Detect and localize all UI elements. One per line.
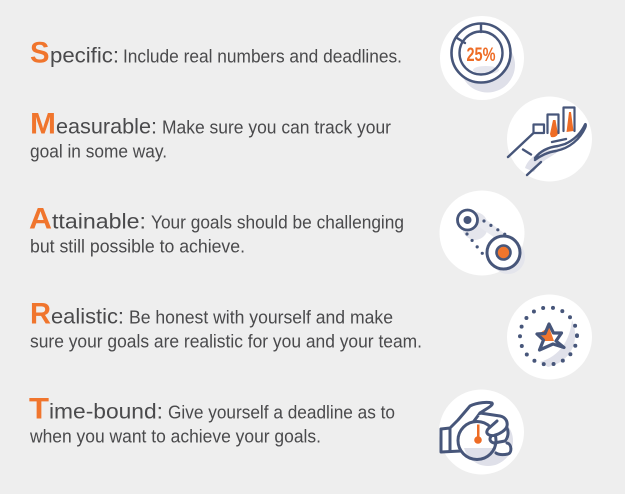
icon: 25% dial (440, 16, 524, 100)
text block: Realistic: ealistic: (51, 304, 124, 328)
text block: Realistic: Be honest with yourself and make (129, 308, 393, 328)
text block: Specific: S (30, 36, 50, 70)
text block: Attainable: ttainable: (52, 210, 146, 234)
text block: Realistic: R (30, 298, 51, 330)
icon: 25% dial: 25% (466, 45, 496, 66)
text block: Realistic (30, 298, 422, 352)
icon: hand holding bars (507, 96, 592, 182)
text block: Specific (30, 36, 402, 70)
icon: linked gears (440, 190, 525, 276)
text block: Time-bound: ime-bound: (49, 400, 163, 424)
icon: star in dotted ring (507, 294, 592, 380)
text block: Attainable: A (29, 202, 52, 236)
text block: Measurable: easurable: (56, 114, 157, 138)
text block: Measurable: goal in some way. (30, 142, 167, 162)
text block: Measurable (30, 108, 391, 162)
text block: Attainable: Your goals should be challenging (151, 212, 404, 232)
text block: Realistic: sure your goals are realistic for you and your team. (30, 332, 422, 352)
text block: Time-bound: when you want to achieve your goals. (29, 426, 321, 446)
text block: Specific: Include real numbers and deadlines. (123, 46, 402, 66)
text block: Measurable: M (30, 108, 56, 140)
icon: hand holding stopwatch (439, 390, 524, 474)
text block: Measurable: Make sure you can track your (162, 118, 391, 138)
text block: Time-bound: T (29, 392, 49, 426)
text block: Time-bound: Give yourself a deadline as to (168, 402, 395, 422)
text block: Attainable (29, 202, 404, 256)
text block: Specific: pecific: (50, 44, 119, 68)
text block: Attainable: but still possible to achieve. (30, 236, 245, 256)
text block: Time-bound (29, 392, 395, 446)
